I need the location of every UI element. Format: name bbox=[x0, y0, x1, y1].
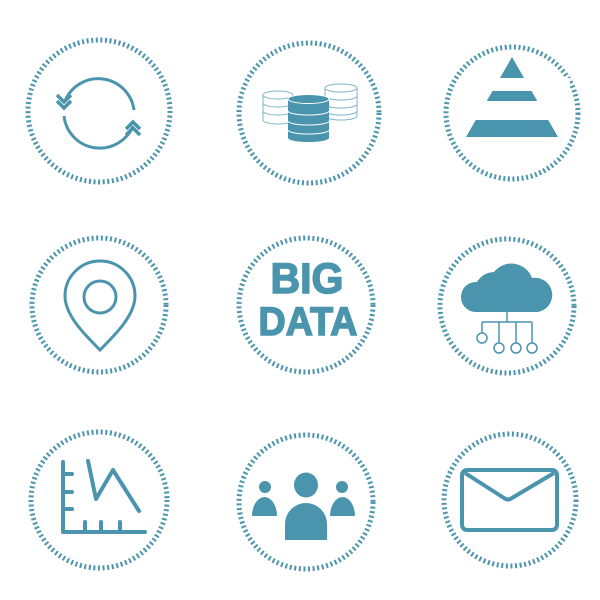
title: BIG DATA: DATA bbox=[258, 300, 358, 344]
icon: pyramid bbox=[460, 57, 570, 137]
icon: refresh cycle bbox=[57, 79, 140, 148]
title: BIG DATA: BIG bbox=[270, 255, 344, 303]
icon: cloud network bbox=[461, 264, 552, 353]
icon: location pin bbox=[65, 261, 135, 350]
icon: envelope bbox=[462, 470, 557, 530]
icon: people bbox=[252, 472, 355, 540]
title: BIG DATA bbox=[258, 255, 358, 344]
icon: line chart bbox=[63, 461, 145, 532]
icon: databases bbox=[263, 84, 357, 142]
